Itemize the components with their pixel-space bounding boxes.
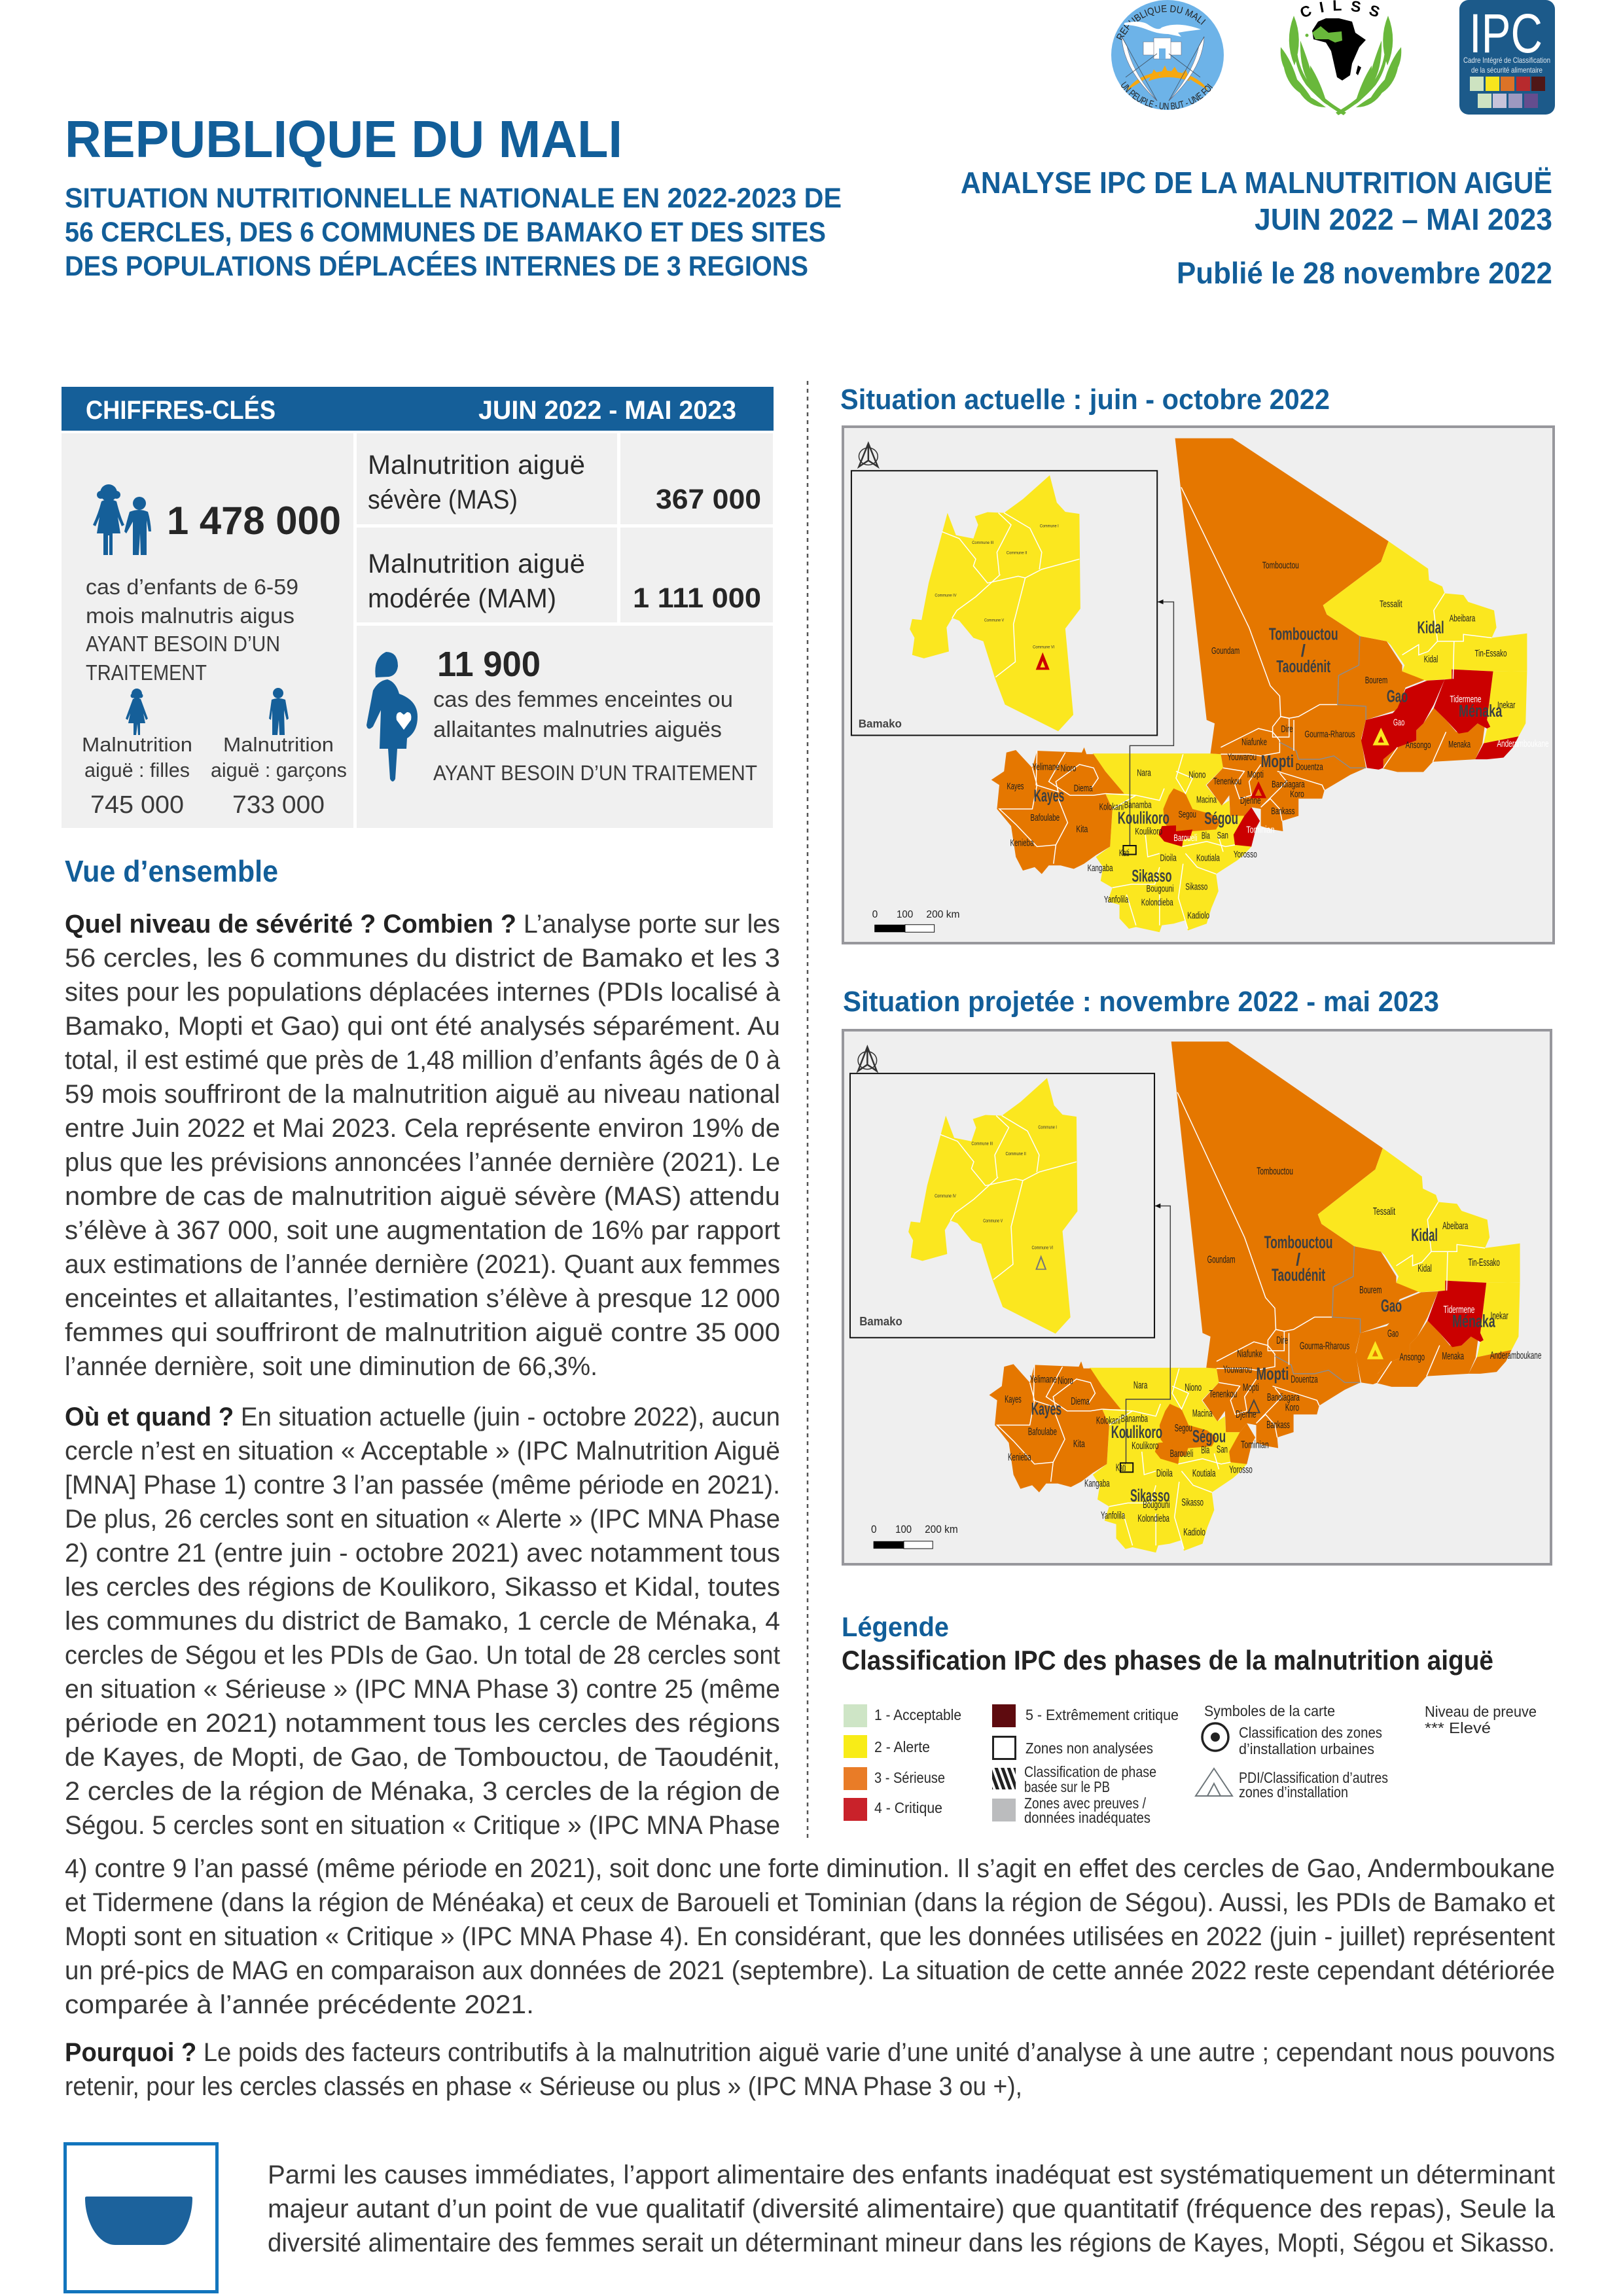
text block: how severe: aux estimations de l’année dernière (2021). Quant aux femmes (65, 1250, 780, 1279)
map region labels: Ségou (1192, 1426, 1226, 1446)
map labels: Dioila (1160, 852, 1177, 863)
map labels: Gourma-Rharous (1300, 1340, 1349, 1352)
legend: phases: 1 - Acceptable (874, 1706, 961, 1723)
map labels: Bafoulabe (1028, 1426, 1057, 1437)
map labels: Douentza (1291, 1373, 1318, 1385)
map labels: Tidermene (1444, 1303, 1474, 1315)
legend: other classes: Classification de phase (1024, 1763, 1156, 1780)
map labels: Sikasso (1185, 880, 1207, 892)
girls figure: 745 000 (90, 791, 184, 819)
map region labels: Gao (1381, 1295, 1402, 1316)
heading: overview: Vue d’ensemble (65, 854, 278, 888)
icon: pregnant woman (366, 652, 418, 781)
legend (842, 1611, 1537, 1826)
map labels: Yorosso (1234, 848, 1257, 860)
text block: where and when: de Kayes, de Mopti, de Gao, de Tombouctou, de Taoudénit, (65, 1743, 780, 1772)
map labels: Kidal (1418, 1263, 1432, 1274)
map labels: Yanfolila (1101, 1509, 1126, 1521)
inset: Bamako: Commune III (971, 1141, 993, 1146)
panel: severe acute malnutrition (357, 433, 773, 524)
map labels: Banamba (1124, 798, 1152, 810)
girls figure: Malnutrition (82, 733, 192, 756)
map labels: Koutiala (1192, 1467, 1216, 1479)
legend: other classes: basée sur le PB (1024, 1778, 1110, 1795)
map labels: Abeibara (1442, 1220, 1469, 1232)
map labels (1007, 559, 1549, 921)
map region labels (1031, 1225, 1495, 1505)
inset: Bamako: Bamako (859, 1315, 902, 1328)
boys figure: 733 000 (232, 791, 325, 819)
map labels: Kati (1116, 1462, 1126, 1473)
legend: map symbols: Symboles de la carte (1204, 1702, 1335, 1719)
logo: IPC: Cadre Intégré de Classification (1463, 56, 1550, 65)
text block: where and when: 2 cercles de la région de Ménaka, 3 cercles de la région de (65, 1777, 780, 1806)
map labels: Bougouni (1147, 882, 1173, 894)
map labels: Abeibara (1450, 612, 1476, 624)
map labels: Inekar (1497, 699, 1515, 711)
panel: children total (62, 433, 353, 828)
map labels: Niono (1185, 1381, 1202, 1393)
women description (433, 687, 757, 785)
text block: where and when (65, 1403, 780, 1840)
map labels: Youwarou (1223, 1363, 1252, 1375)
map region labels: / (1296, 1249, 1300, 1269)
text block: how severe: Quel niveau de sévérité ? Combien ? L’analyse porte sur les (65, 910, 780, 939)
text block: how severe: 59 mois souffriront de la malnutrition aiguë au niveau national (65, 1080, 780, 1109)
map labels: Douentza (1296, 761, 1323, 772)
map labels: Yanfolila (1104, 893, 1129, 905)
panel: women: 11 900 (437, 645, 541, 684)
legend: evidence level: Niveau de preuve (1425, 1703, 1537, 1720)
map region labels: Kidal (1411, 1225, 1438, 1245)
panel: key figures (62, 387, 774, 828)
map labels: Bandiagara (1267, 1391, 1300, 1403)
map labels: Bourem (1359, 1284, 1382, 1295)
text block: immediate causes: diversité alimentaire des femmes serait un déterminant mineur dans les régions de Kayes, Mopti, Ségou et Sikasso. (268, 2229, 1555, 2257)
map labels: Kolondieba (1141, 896, 1173, 908)
legend: other classes: données inadéquates (1024, 1809, 1150, 1826)
map labels: Koro (1285, 1401, 1299, 1413)
panel: women (357, 626, 773, 828)
logo: CILSS (1280, 0, 1402, 115)
map labels: Sikasso (1181, 1496, 1204, 1508)
map labels: Gao (1387, 1327, 1399, 1339)
heading: current situation: Situation actuelle : juin - octobre 2022 (840, 384, 1330, 416)
text block: where and when: en situation « Sérieuse » (IPC MNA Phase 3) contre 25 (même (65, 1675, 780, 1704)
map labels: Bougouni (1143, 1498, 1170, 1510)
map labels: Ansongo (1400, 1351, 1425, 1363)
icon: bowl (65, 2144, 217, 2292)
map labels: Mopti (1243, 1381, 1259, 1393)
children description: AYANT BESOIN D’UN (86, 632, 280, 656)
scale bar: 100 (895, 1524, 912, 1535)
legend: evidence level (1425, 1703, 1537, 1736)
scale bar: 200 km (925, 1524, 958, 1535)
map region labels: Kayes (1031, 1399, 1061, 1419)
map labels: Yelimane (1032, 761, 1060, 772)
map labels: Macina (1196, 793, 1217, 805)
map region labels: Kidal (1418, 618, 1444, 637)
text block: why: Pourquoi ? Le poids des facteurs contributifs à la malnutrition aiguë varie d’une unité d’analyse à une autre ; cependant nous pouvons (65, 2038, 1555, 2067)
map labels: Diema (1074, 782, 1093, 793)
children description: mois malnutris aigus (86, 603, 294, 628)
legend: other classes (992, 1704, 1179, 1826)
map labels: Nioro (1061, 762, 1076, 774)
legend: other classes: Zones non analysées (1026, 1740, 1153, 1757)
map labels: Segou (1175, 1422, 1192, 1433)
map labels: Gourma-Rharous (1305, 728, 1355, 740)
map labels: Kita (1076, 823, 1088, 834)
women description: AYANT BESOIN D’UN TRAITEMENT (433, 761, 757, 785)
panel: severe acute malnutrition: 367 000 (656, 484, 761, 515)
map labels: Gao (1393, 716, 1404, 728)
inset: Bamako: Commune III (972, 540, 993, 545)
map labels: Segou (1179, 808, 1196, 819)
text block: how severe: l’année dernière, soit une diminution de 66,3%. (65, 1352, 597, 1381)
text block: how severe: s’élève à 367 000, soit une augmentation de 16% par rapport (65, 1216, 780, 1245)
analysis title and publication date (961, 166, 1552, 290)
logo: IPC (1459, 0, 1555, 115)
text block: immediate causes (268, 2161, 1556, 2257)
text block: where and when: De plus, 26 cercles sont en situation « Alerte » (IPC MNA Phase (65, 1505, 780, 1534)
scale bar: 100 (897, 908, 913, 920)
legend: map symbols: d’installation urbaines (1239, 1740, 1374, 1757)
inset: Bamako: Commune I (1038, 1125, 1057, 1130)
text block: how severe: total, il est estimé que près de 1,48 million d’enfants âgés de 0 à (65, 1046, 781, 1075)
icon: girl and boy (93, 484, 151, 555)
map labels: Kenieba (1008, 1451, 1031, 1463)
map labels: Bandiagara (1272, 778, 1305, 789)
icon: boy (269, 688, 289, 735)
map labels: Tidermene (1450, 693, 1482, 704)
map labels: Koutiala (1196, 852, 1220, 863)
map labels: Bafoulabe (1031, 812, 1060, 823)
panel: severe acute malnutrition: Malnutrition aiguë (368, 450, 585, 480)
inset: Bamako: Commune V (984, 618, 1005, 622)
logo: coat of arms of Mali: REPUBLIQUE DU MALI (1116, 5, 1205, 41)
panel: moderate acute malnutrition: modérée (MAM) (368, 583, 556, 613)
scale bar: 0 (871, 1524, 877, 1535)
map labels: Kangaba (1088, 862, 1113, 874)
map labels: Dire (1276, 1334, 1288, 1346)
text block: why (65, 2038, 1555, 2101)
text block: how severe: enceintes et allaitantes, l’estimation s’élève à presque 12 000 (65, 1284, 780, 1313)
inset: Bamako (850, 1073, 1154, 1338)
text block: why: retenir, pour les cercles classés en phase « Sérieuse ou plus » (IPC MNA Phase 3 ou +), (65, 2072, 1022, 2101)
women description: cas des femmes enceintes ou (433, 687, 733, 712)
map labels: Niono (1188, 768, 1205, 780)
logo: coat of arms of Mali: UN PEUPLE - UN BUT - UNE FOI (1121, 81, 1213, 110)
legend heading: Classification IPC des phases de la malnutrition aiguë (842, 1645, 1493, 1676)
map labels: Goundam (1207, 1253, 1235, 1265)
map labels: Kolokani (1099, 800, 1124, 812)
inset: Bamako (851, 471, 1157, 736)
map labels: Djenne (1236, 1408, 1257, 1420)
icon: girl (126, 689, 148, 735)
inset: Bamako: Commune I (1040, 524, 1059, 528)
legend heading (842, 1611, 1493, 1676)
map: projected situation: Anderamboukane (1490, 1350, 1541, 1361)
text block: where and when: cercles de Ségou et les PDIs de Gao. Un total de 28 cercles sont (65, 1641, 780, 1670)
analysis title and publication date: JUIN 2022 – MAI 2023 (1255, 202, 1552, 236)
text block: where and when: les communes du district de Bamako, 1 cercle de Ménaka, 4 (65, 1607, 780, 1636)
map region labels: Taoudénit (1276, 657, 1330, 676)
map labels: Tominian (1246, 823, 1274, 835)
inset: Bamako: Commune VI (1031, 1245, 1053, 1250)
text block: where and when continued: comparée à l’année précédente 2021. (65, 1990, 534, 2019)
legend: evidence level: *** Elevé (1425, 1719, 1491, 1736)
legend: map symbols: PDI/Classification d’autres (1239, 1769, 1388, 1786)
legend: phases: 2 - Alerte (874, 1738, 930, 1755)
text block: immediate causes: Parmi les causes immédiates, l’apport alimentaire des enfants inadéquat est systématiquement un déterminant (268, 2161, 1555, 2189)
legend: phases: 3 - Sérieuse (874, 1769, 945, 1786)
map region labels: Ménaka (1452, 1311, 1495, 1331)
subtitle: 56 CERCLES, DES 6 COMMUNES DE BAMAKO ET DES SITES (65, 217, 826, 248)
map labels: Menaka (1448, 738, 1471, 749)
map region labels: Ménaka (1459, 702, 1503, 721)
map: current situation (843, 427, 1554, 943)
children description: TRAITEMENT (86, 660, 207, 685)
subtitle: SITUATION NUTRITIONNELLE NATIONALE EN 2022-2023 DE (65, 183, 842, 214)
text block: how severe: plus que les prévisions annoncées l’année dernière (2021). Le (65, 1148, 780, 1177)
map labels: Inekar (1491, 1310, 1508, 1321)
inset: Bamako: Commune II (1005, 1151, 1026, 1157)
map labels: Kita (1073, 1437, 1085, 1449)
scale bar (872, 908, 960, 932)
map labels: Kayes (1007, 780, 1024, 792)
inset: Bamako: Commune IV (935, 593, 957, 598)
map labels: Kolokani (1096, 1414, 1120, 1426)
map labels: Diema (1071, 1395, 1090, 1407)
map: projected situation (843, 1030, 1551, 1564)
map labels: Baroueli (1170, 1447, 1193, 1459)
map labels: Tombouctou (1262, 559, 1299, 571)
children description: cas d’enfants de 6-59 (86, 575, 298, 599)
map labels: San (1217, 1443, 1228, 1455)
text block: where and when: 2) contre 21 (entre juin - octobre 2021) avec notamment tous (65, 1539, 780, 1568)
map region labels: Tombouctou (1264, 1232, 1333, 1252)
map region labels (1034, 618, 1503, 886)
map labels: Nara (1133, 1379, 1148, 1391)
panel: moderate acute malnutrition: Malnutrition aiguë (368, 548, 585, 579)
choropleth of Mali circles (990, 1041, 1520, 1552)
key figures header: JUIN 2022 - MAI 2023 (478, 396, 736, 425)
map labels: Kolondieba (1137, 1512, 1169, 1524)
legend heading: Légende (842, 1611, 949, 1642)
text block: how severe: Bamako, Mopti et Gao) qui ont été analysés séparément. Au (65, 1012, 780, 1041)
scale bar (871, 1524, 958, 1549)
map region labels: Sikasso (1132, 867, 1172, 886)
text block: how severe: entre Juin 2022 et Mai 2023. Cela représente environ 19% de (65, 1114, 780, 1143)
text block: where and when: Où et quand ? En situation actuelle (juin - octobre 2022), aucun (65, 1403, 780, 1431)
inset: Bamako: Commune V (983, 1218, 1003, 1223)
legend: map symbols (1196, 1702, 1388, 1801)
map region labels: Mopti (1261, 752, 1294, 771)
logo: IPC: IPC (1469, 3, 1543, 64)
subtitle: DES POPULATIONS DÉPLACÉES INTERNES DE 3 REGIONS (65, 251, 808, 282)
text block: where and when continued: et Tidermene (dans la région de Ménéaka) et ceux de Baroueli et Tominian (dans la région de Ségou). Aussi, les PDIs de Bamako et (65, 1888, 1555, 1917)
map labels: Kidal (1424, 653, 1438, 664)
choropleth of Mali circles (991, 439, 1527, 932)
text block: where and when: [MNA] Phase 1) contre 3 l’an passée (même période en 2021). (65, 1471, 780, 1499)
text block: where and when: période en 2021) notamment tous les cercles des régions (65, 1709, 780, 1738)
analysis title and publication date: Publié le 28 novembre 2022 (1177, 256, 1552, 290)
subtitle (65, 183, 842, 282)
map labels: Bankass (1271, 805, 1294, 816)
text block: where and when continued (65, 1854, 1555, 2019)
panel: moderate acute malnutrition (357, 528, 773, 622)
map: current situation: Anderamboukane (1497, 738, 1549, 749)
text block: immediate causes: majeur autant d’un point de vue qualitatif (diversité alimentaire) que quantitatif (fréquence des repas), Seule la (268, 2195, 1556, 2223)
girls figure (82, 733, 192, 819)
map labels: Tessalit (1380, 598, 1402, 609)
inset: Bamako: Commune II (1007, 550, 1027, 555)
women description: allaitantes malnutries aiguës (433, 717, 722, 742)
text block: how severe: femmes qui souffriront de malnutrition aiguë contre 35 000 (65, 1318, 780, 1347)
key figures header: CHIFFRES-CLÉS (86, 395, 276, 425)
map labels: Kadiolo (1183, 1526, 1205, 1538)
map region labels: / (1301, 641, 1306, 660)
map region labels: Mopti (1257, 1363, 1289, 1384)
map labels: Menaka (1442, 1350, 1464, 1362)
analysis title and publication date: ANALYSE IPC DE LA MALNUTRITION AIGUË (961, 166, 1552, 200)
map region labels: Ségou (1204, 809, 1238, 828)
map region labels: Kayes (1034, 786, 1064, 805)
scale bar: 200 km (926, 908, 960, 920)
text block: where and when continued: un pré-pics de MAG en comparaison aux données de 2021 (septembre). La situation de cette année 2022 reste cependant détériorée (65, 1956, 1555, 1985)
boys figure: aiguë : garçons (211, 759, 347, 781)
map labels: Goundam (1211, 645, 1240, 656)
legend: map symbols: Classification des zones (1239, 1724, 1382, 1741)
map labels: Kati (1119, 847, 1130, 858)
text block: how severe: 56 cercles, les 6 communes du district de Bamako et les 3 (65, 944, 780, 973)
map region labels: Koulikoro (1111, 1422, 1162, 1442)
map labels: Tin-Essako (1468, 1256, 1500, 1268)
girls figure: aiguë : filles (84, 759, 190, 781)
map labels: San (1217, 829, 1228, 840)
map labels: Koro (1290, 788, 1304, 800)
text block: where and when continued: Mopti sont en situation « Critique » (IPC MNA Phase 4). En considérant, que les données utilisées en 2022 (juin - juillet) représentent (65, 1922, 1555, 1951)
map region labels: Koulikoro (1118, 808, 1169, 827)
legend: phases: 4 - Critique (874, 1799, 942, 1816)
map labels: Nioro (1058, 1374, 1073, 1386)
map labels: Ansongo (1406, 739, 1431, 750)
logo: coat of arms of Mali (1111, 0, 1224, 110)
map region labels: Tombouctou (1269, 624, 1338, 643)
map labels: Koulikoro (1135, 825, 1162, 837)
boys figure: Malnutrition (223, 733, 334, 756)
map labels: Dioila (1156, 1467, 1173, 1479)
text block: where and when: Ségou. 5 cercles sont en situation « Critique » (IPC MNA Phase (65, 1811, 780, 1840)
text block: how severe: nombre de cas de malnutrition aiguë sévère (MAS) attendu (65, 1182, 780, 1211)
map labels: Niafunke (1241, 736, 1267, 747)
map labels: Baroueli (1173, 832, 1197, 843)
panel: severe acute malnutrition: sévère (MAS) (368, 484, 518, 514)
scale bar: 0 (872, 908, 878, 920)
map labels: Tenenkou (1213, 775, 1241, 787)
text block: how severe (65, 910, 781, 1381)
title: REPUBLIQUE DU MALI (65, 110, 622, 168)
key figures header (62, 387, 774, 431)
panel: children total: 1 478 000 (167, 499, 341, 543)
map labels: Bankass (1266, 1419, 1290, 1431)
map region labels: Taoudénit (1272, 1265, 1325, 1285)
inset: Bamako: Commune VI (1033, 645, 1054, 649)
inset: Bamako: Commune IV (935, 1193, 956, 1198)
legend: other classes: 5 - Extrêmement critique (1026, 1706, 1179, 1723)
map labels: Dire (1281, 723, 1293, 734)
map labels: Youwarou (1227, 751, 1257, 762)
map labels: Bla (1201, 1444, 1210, 1456)
logo: IPC: de la sécurité alimentaire (1471, 65, 1543, 75)
map labels: Mopti (1247, 768, 1264, 780)
map labels: Bla (1202, 829, 1210, 841)
map labels: Tominian (1241, 1439, 1269, 1450)
inset: Bamako: Bamako (859, 717, 902, 730)
map labels: Banamba (1121, 1412, 1148, 1424)
map labels: Kenieba (1010, 836, 1034, 848)
panel: moderate acute malnutrition: 1 111 000 (633, 583, 761, 614)
children description (86, 575, 298, 685)
map labels: Tin-Essako (1474, 647, 1507, 659)
map labels: Yelimane (1030, 1373, 1057, 1385)
legend: other classes: Zones avec preuves / (1024, 1795, 1147, 1812)
map labels: Kayes (1005, 1393, 1022, 1405)
map labels: Kadiolo (1187, 909, 1209, 921)
text block: where and when continued: 4) contre 9 l’an passé (même période en 2021), soit donc une forte diminution. Il s’agit en effet des cercles de Gao, Andermboukane (65, 1854, 1555, 1883)
map labels: Niafunke (1237, 1348, 1262, 1359)
map labels: Macina (1192, 1407, 1213, 1419)
heading: projected situation: Situation projetée : novembre 2022 - mai 2023 (843, 986, 1439, 1018)
map labels: Tombouctou (1257, 1165, 1293, 1177)
map labels: Tenenkou (1209, 1388, 1237, 1400)
map labels: Koulikoro (1132, 1440, 1158, 1452)
map region labels: Sikasso (1130, 1485, 1170, 1505)
map region labels: Gao (1387, 687, 1408, 706)
text block: where and when: cercle n’est en situation « Acceptable » (IPC Malnutrition Aiguë (65, 1437, 780, 1465)
map labels: Djenne (1240, 795, 1261, 806)
map labels: Kangaba (1084, 1477, 1110, 1489)
legend: map symbols: zones d’installation (1239, 1784, 1348, 1801)
boys figure (211, 733, 347, 819)
legend: phases (844, 1704, 961, 1821)
map labels: Bourem (1365, 674, 1387, 685)
text block: how severe: sites pour les populations déplacées internes (PDIs localisé à (65, 978, 781, 1007)
map labels: Nara (1137, 766, 1151, 778)
text block: where and when: les cercles des régions de Koulikoro, Sikasso et Kidal, toutes (65, 1573, 780, 1602)
map labels: Tessalit (1373, 1205, 1395, 1217)
map labels (1005, 1165, 1541, 1538)
map labels: Yorosso (1229, 1463, 1253, 1475)
